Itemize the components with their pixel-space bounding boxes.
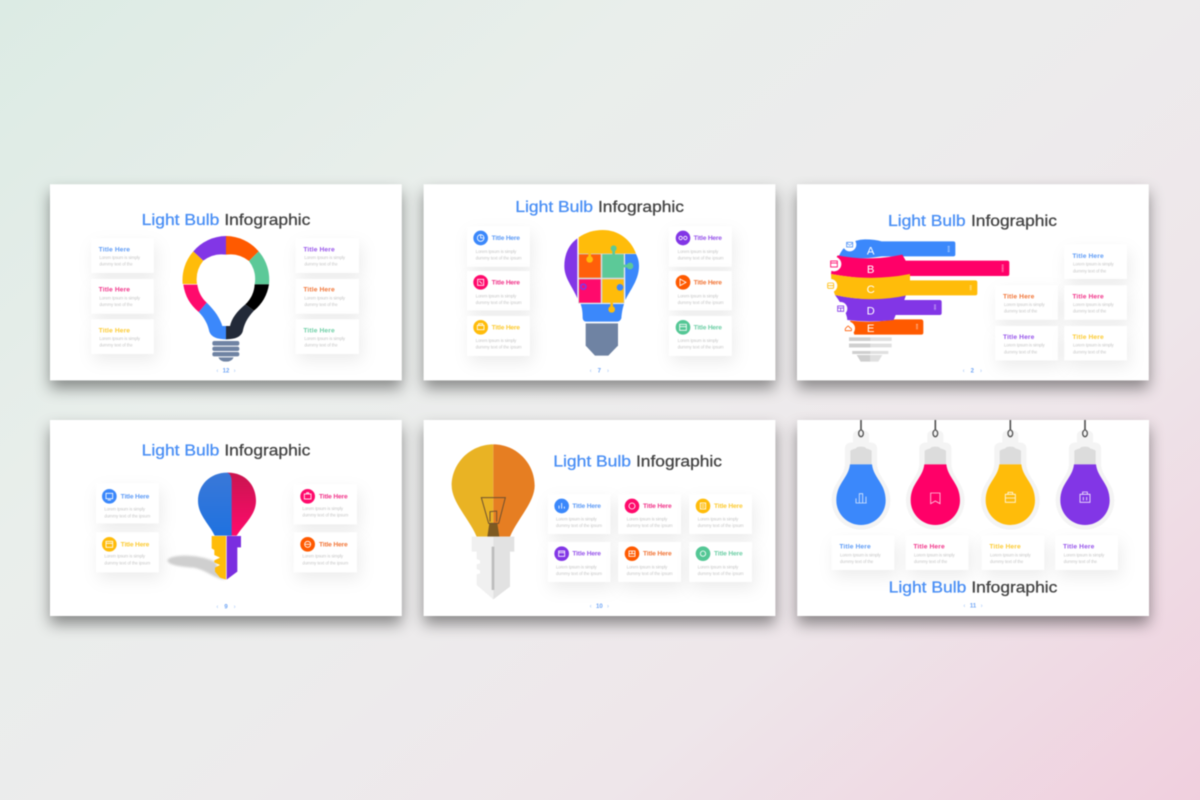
text card: blue: dummy text of the (99, 262, 133, 267)
icon card: orange: dummy text of the ipsum (678, 300, 724, 305)
icon: cloud on E (842, 322, 855, 335)
icon card: purple: dummy text of the ipsum (678, 256, 724, 261)
icon: mail on A (843, 238, 856, 251)
page number (963, 369, 982, 375)
text card: orange (296, 279, 359, 314)
filament light bulb with key base (452, 444, 535, 599)
text card: blue: Title Here (839, 544, 871, 551)
text card: green: Title Here (303, 327, 335, 334)
heading: Light Bulb (888, 213, 966, 230)
heading: Infographic (224, 212, 310, 229)
hanging bulb: purple (1056, 420, 1114, 530)
text card: blue: Lorem Ipsum is simply (99, 255, 141, 260)
text card: yellow: Lorem Ipsum is simply (990, 552, 1031, 557)
heading (142, 442, 310, 459)
icon card: pink: Lorem Ipsum is simply (302, 506, 344, 511)
text card: yellow: Title Here (99, 327, 130, 334)
text card: green: Lorem Ipsum is simply (304, 336, 346, 341)
page number: ‹ (590, 604, 592, 610)
text card: pink: dummy text of the (1073, 309, 1107, 314)
page number: ‹ (963, 369, 965, 375)
icon card: green (669, 316, 732, 356)
panel: slide 10 filament key bulb (424, 420, 775, 616)
icon card: orange: dummy text of the ipsum (627, 571, 673, 576)
text card: yellow: dummy text of the (990, 559, 1024, 564)
text card: orange: Title Here (1003, 293, 1035, 300)
hanging bulb: pink (906, 420, 965, 530)
text card: blue (91, 238, 154, 273)
icon card: green: dummy text of the ipsum (678, 345, 724, 350)
heading (553, 454, 722, 471)
heading: Infographic (971, 579, 1057, 596)
text card: pink (1064, 285, 1127, 320)
text card: pink: Title Here (99, 287, 130, 294)
panel: slide 11 hanging bulbs (797, 420, 1149, 616)
icon card: yellow (96, 532, 159, 572)
text card: pink: dummy text of the (914, 559, 948, 564)
text card: purple: dummy text of the (304, 262, 338, 267)
heading: Light Bulb (142, 442, 219, 459)
icon card: yellow: Lorem Ipsum is simply (698, 516, 739, 521)
text card: blue: Title Here (99, 246, 130, 253)
text card: blue (832, 536, 894, 570)
hanging bulb: yellow (981, 420, 1040, 530)
icon card: blue (96, 483, 159, 523)
icon card: purple: Title Here (694, 235, 722, 242)
puzzle light bulb (564, 230, 639, 356)
text card: yellow: Lorem Ipsum is simply (1073, 343, 1114, 348)
page number: ‹ (963, 604, 965, 610)
text card: blue (1064, 245, 1127, 279)
icon card: green: Lorem Ipsum is simply (698, 564, 739, 569)
icon card: orange: Title Here (694, 279, 722, 286)
hanging bulb: blue (832, 420, 890, 530)
page number (963, 604, 983, 610)
icon card: yellow (467, 316, 530, 356)
heading (889, 579, 1057, 596)
panel: slide 2 layered bars bulb (797, 184, 1149, 380)
text card: purple (995, 326, 1058, 360)
page number: 7 (598, 369, 602, 375)
icon card: blue: Title Here (121, 493, 150, 500)
text card: pink: dummy text of the (99, 302, 133, 307)
panel: slide 9 key bulb (50, 420, 402, 616)
icon card: pink: Lorem Ipsum is simply (476, 293, 517, 298)
panel: slide 12 ring bulb (50, 184, 402, 380)
text card: green: dummy text of the (304, 343, 338, 348)
icon card: pink (618, 494, 681, 534)
icon card: orange: Lorem Ipsum is simply (627, 564, 668, 569)
page number: › (980, 369, 982, 375)
key shadow (167, 556, 225, 580)
icon card: green: dummy text of the ipsum (698, 571, 744, 576)
text card: purple (1055, 536, 1118, 570)
text card: orange: Lorem Ipsum is simply (1004, 302, 1045, 307)
icon card: blue: Lorem Ipsum is simply (556, 516, 597, 521)
text card: pink: Lorem Ipsum is simply (99, 295, 141, 300)
key shaped light bulb (167, 473, 256, 580)
heading: Light Bulb (553, 454, 631, 471)
heading (888, 213, 1057, 230)
text card: yellow: dummy text of the (99, 343, 133, 348)
text card: blue: Lorem Ipsum is simply (1073, 262, 1114, 267)
icon card: blue: dummy text of the ipsum (104, 513, 151, 518)
icon card: purple: Lorem Ipsum is simply (678, 249, 719, 254)
layered bar light bulb (831, 239, 1009, 362)
icon card: pink: Lorem Ipsum is simply (627, 516, 668, 521)
page number: ‹ (590, 369, 592, 375)
page number (216, 369, 236, 375)
page number (590, 369, 609, 375)
page number: 2 (971, 369, 975, 375)
icon card: green (689, 542, 752, 582)
page number: › (607, 369, 609, 375)
icon: box on B (827, 257, 841, 271)
icon card: orange (669, 271, 732, 310)
text card: purple: dummy text of the (1004, 349, 1038, 354)
icon card: blue: Lorem Ipsum is simply (104, 507, 146, 512)
page number: › (234, 369, 236, 375)
icon card: yellow: Lorem Ipsum is simply (476, 338, 517, 343)
text card: purple: Title Here (1003, 334, 1035, 341)
text card: purple: Lorem Ipsum is simply (304, 255, 346, 260)
icon card: blue: dummy text of the ipsum (556, 523, 602, 528)
panel: slide 7 puzzle bulb (424, 184, 775, 380)
text card: yellow: Title Here (1072, 334, 1104, 341)
heading (142, 212, 310, 229)
segmented ring light bulb (182, 236, 269, 362)
icon card: yellow: dummy text of the ipsum (476, 345, 522, 350)
page number: › (234, 604, 236, 610)
bar letters (867, 245, 875, 335)
icon card: orange: Title Here (319, 541, 348, 548)
icon card: purple (548, 542, 610, 582)
text card: yellow (982, 536, 1044, 570)
text card: purple: Lorem Ipsum is simply (1064, 552, 1105, 557)
text card: orange: Title Here (303, 287, 335, 294)
icon card: blue (548, 494, 610, 534)
icon card: yellow: Title Here (121, 541, 150, 548)
icon card: purple: dummy text of the ipsum (556, 571, 602, 576)
text card: purple: Title Here (303, 246, 335, 253)
icon card: blue: Lorem Ipsum is simply (476, 249, 517, 254)
page number (216, 604, 236, 610)
icon: card on C (824, 279, 837, 292)
icon card: orange: Lorem Ipsum is simply (302, 554, 344, 559)
text card: blue: dummy text of the (1073, 268, 1107, 273)
text card: blue: Lorem Ipsum is simply (840, 552, 881, 557)
icon card: blue: dummy text of the ipsum (476, 256, 522, 261)
icon card: orange (618, 542, 681, 582)
icon card: blue (467, 227, 530, 267)
text card: orange: Lorem Ipsum is simply (304, 295, 346, 300)
text card: orange: dummy text of the (304, 302, 338, 307)
page number: 12 (223, 369, 230, 375)
icon card: orange: dummy text of the ipsum (302, 560, 349, 565)
icon card: orange: Lorem Ipsum is simply (678, 293, 719, 298)
icon card: green: Title Here (694, 324, 722, 331)
text card: yellow: Lorem Ipsum is simply (99, 336, 141, 341)
heading: Light Bulb (515, 199, 593, 216)
bar letters: B (867, 264, 874, 276)
icon card: purple (669, 227, 732, 267)
bar letters: D (867, 305, 875, 317)
page number: 10 (596, 604, 603, 610)
page number: › (607, 604, 609, 610)
text card: orange (995, 285, 1058, 320)
page number: 9 (224, 604, 228, 610)
icon card: pink: Title Here (643, 503, 672, 510)
icon card: yellow (689, 494, 752, 534)
text card: purple (296, 238, 359, 273)
page number (590, 604, 609, 610)
text card: purple: dummy text of the (1064, 559, 1098, 564)
page number: ‹ (216, 604, 218, 610)
icon card: blue: Title Here (572, 503, 601, 510)
text card: pink (91, 279, 154, 314)
page number: › (981, 604, 983, 610)
icon card: green: Title Here (714, 551, 743, 558)
icon card: pink: Title Here (492, 279, 520, 286)
heading: Infographic (598, 199, 684, 216)
icon card: pink (467, 271, 530, 310)
text card: yellow (91, 319, 154, 354)
text card: pink (906, 536, 968, 570)
icon card: pink: dummy text of the ipsum (476, 300, 522, 305)
text card: pink: Lorem Ipsum is simply (914, 552, 955, 557)
text card: yellow (1064, 326, 1127, 360)
text card: pink: Title Here (913, 544, 945, 551)
text card: purple: Title Here (1063, 544, 1095, 551)
page number: ‹ (216, 369, 218, 375)
text card: orange: dummy text of the (1004, 309, 1038, 314)
bar letters: C (867, 284, 875, 296)
icon card: yellow: dummy text of the ipsum (104, 560, 151, 565)
icon card: yellow: Title Here (714, 503, 743, 510)
text card: yellow: Title Here (989, 544, 1021, 551)
icon card: yellow: dummy text of the ipsum (698, 523, 744, 528)
icon card: yellow: Lorem Ipsum is simply (104, 554, 146, 559)
heading: Infographic (224, 442, 310, 459)
icon card: purple: Title Here (572, 551, 601, 558)
icon: calendar on D (834, 302, 847, 315)
text card: yellow: dummy text of the (1073, 349, 1107, 354)
heading: Light Bulb (142, 212, 219, 229)
icon card: pink: Title Here (319, 493, 348, 500)
icon card: blue: Title Here (492, 235, 520, 242)
icon card: purple: Lorem Ipsum is simply (556, 564, 597, 569)
text card: pink: Lorem Ipsum is simply (1073, 302, 1114, 307)
icon card: pink (294, 484, 357, 524)
icon card: yellow: Title Here (492, 324, 520, 331)
text card: blue: Title Here (1072, 253, 1104, 260)
icon card: pink: dummy text of the ipsum (627, 523, 673, 528)
text card: blue: dummy text of the (840, 559, 874, 564)
bar letters: A (867, 245, 875, 257)
text card: pink: Title Here (1072, 293, 1104, 300)
text card: green (296, 319, 359, 354)
icon card: pink: dummy text of the ipsum (302, 513, 349, 518)
icon card: orange (294, 532, 357, 572)
icon card: green: Lorem Ipsum is simply (678, 338, 719, 343)
text card: purple: Lorem Ipsum is simply (1004, 343, 1045, 348)
page number: 11 (970, 604, 977, 610)
bar letters: E (867, 323, 875, 335)
heading (515, 199, 684, 216)
heading: Infographic (636, 454, 722, 471)
icon card: orange: Title Here (643, 551, 672, 558)
heading: Infographic (971, 213, 1057, 230)
heading: Light Bulb (889, 579, 966, 596)
